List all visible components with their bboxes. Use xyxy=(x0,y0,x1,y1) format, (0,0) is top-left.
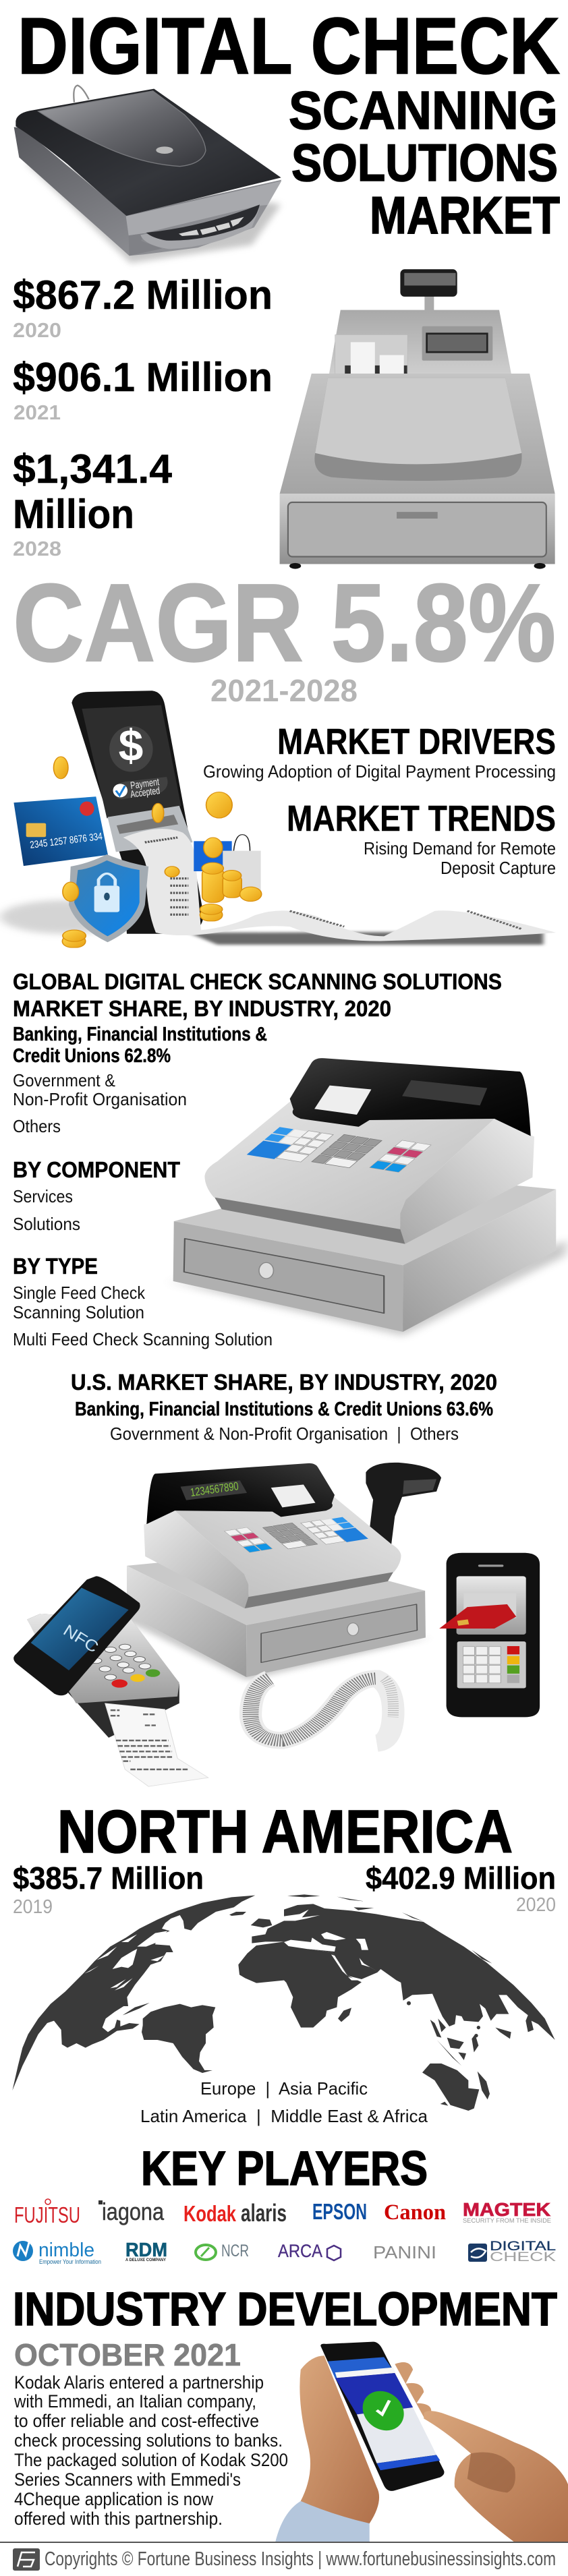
logos row one: alaris xyxy=(241,2199,287,2227)
market size values: 2021 xyxy=(13,401,61,424)
icon: grey cash register xyxy=(280,269,555,569)
by type: BY TYPE xyxy=(13,1254,98,1279)
industry segments: Government & xyxy=(13,1070,115,1090)
regional values: $402.9 Million xyxy=(366,1861,556,1896)
footer rule xyxy=(0,2542,568,2543)
illustration: hands holding phone xyxy=(275,2342,568,2542)
title: SCANNING xyxy=(289,80,558,140)
market size values: Million xyxy=(13,492,134,537)
development text: with Emmedi, an Italian company, xyxy=(13,2391,256,2411)
other regions: Latin America | Middle East & Africa xyxy=(140,2106,428,2126)
world map globe: eastern hemisphere xyxy=(238,1894,555,2111)
regional heading: NORTH AMERICA xyxy=(57,1798,513,1866)
market size values xyxy=(13,272,273,560)
world map globe: western hemisphere xyxy=(12,1896,272,2090)
icon: register with scanner xyxy=(117,1463,431,1680)
CAGR period: 2021-2028 xyxy=(210,673,358,708)
U.S. market share: Government & Non-Profit Organisation | Others xyxy=(110,1424,459,1444)
logos row two: A DELUXE COMPANY xyxy=(125,2258,166,2262)
logos row one: EPSON xyxy=(312,2199,367,2224)
regional values xyxy=(13,1861,556,1918)
by component: Solutions xyxy=(13,1214,80,1234)
icon: large cash register xyxy=(167,1058,568,1336)
development text xyxy=(13,2372,288,2529)
other regions: Europe | Asia Pacific xyxy=(200,2078,368,2099)
logos row two: nimble xyxy=(38,2240,94,2261)
date: OCTOBER 2021 xyxy=(14,2337,241,2372)
development text: Series Scanners with Emmedi's xyxy=(14,2469,241,2490)
development text: offered with this partnership. xyxy=(14,2509,223,2529)
industry segments: Credit Unions 62.8% xyxy=(13,1045,171,1067)
logos row two: RDM xyxy=(125,2240,167,2261)
industry segments: Non-Profit Organisation xyxy=(13,1089,187,1109)
title xyxy=(18,1,560,245)
logos row one: iagona xyxy=(102,2198,165,2225)
key players heading: KEY PLAYERS xyxy=(141,2142,428,2196)
logos row one: Kodak xyxy=(183,2201,236,2226)
by type xyxy=(13,1254,273,1349)
market size values: $867.2 Million xyxy=(13,272,273,318)
market trends: Deposit Capture xyxy=(441,858,556,878)
by type: Multi Feed Check Scanning Solution xyxy=(13,1329,273,1349)
regional values: $385.7 Million xyxy=(13,1861,204,1896)
logos row one: MAGTEK xyxy=(463,2199,550,2220)
register digits: 1234567890 xyxy=(190,1480,239,1499)
regional values: 2020 xyxy=(516,1894,556,1916)
illustration: payment terminal, phone, receipts xyxy=(13,1553,540,1786)
market size values: 2020 xyxy=(13,318,61,342)
market size values: $1,341.4 xyxy=(13,446,173,492)
logos row one xyxy=(14,2198,551,2227)
development text: The packaged solution of Kodak S200 xyxy=(14,2450,288,2470)
global market share heading xyxy=(13,969,502,1021)
industry segments: Banking, Financial Institutions & xyxy=(13,1024,267,1045)
payment accepted label: Accepted xyxy=(130,785,161,800)
icon: flatbed scanner xyxy=(14,86,281,263)
market drivers xyxy=(203,722,556,782)
logos row two: CHECK xyxy=(490,2250,556,2264)
logos row two: Empower Your Information xyxy=(39,2258,101,2265)
logos row one: SECURITY FROM THE INSIDE xyxy=(463,2217,551,2224)
footer logo xyxy=(13,2548,40,2571)
by component: Services xyxy=(13,1186,73,1206)
card number: 2345 1257 8676 334 xyxy=(29,831,103,851)
global market share heading: MARKET SHARE, BY INDUSTRY, 2020 xyxy=(13,996,391,1021)
illustration: payment phone, card, shield, receipt xyxy=(0,691,556,947)
U.S. market share: U.S. MARKET SHARE, BY INDUSTRY, 2020 xyxy=(71,1370,497,1395)
logos row two: NCR xyxy=(221,2242,249,2260)
logos row two: DIGITAL xyxy=(490,2240,556,2254)
U.S. market share xyxy=(71,1370,497,1444)
development text: Kodak Alaris entered a partnership xyxy=(14,2372,264,2393)
by type: Scanning Solution xyxy=(13,1302,144,1322)
regional values: 2019 xyxy=(13,1896,53,1918)
other regions xyxy=(140,2078,428,2126)
industry segments: Others xyxy=(13,1116,61,1136)
logos row two: ARCA xyxy=(278,2241,322,2261)
by type: Single Feed Check xyxy=(13,1283,146,1303)
development text: check processing solutions to banks. xyxy=(14,2430,283,2451)
by component: BY COMPONENT xyxy=(13,1157,180,1182)
phone dollar icon: $ xyxy=(119,720,143,770)
payment accepted label xyxy=(130,776,161,800)
development text: to offer reliable and cost-effective xyxy=(14,2411,259,2431)
NFC label: NFC xyxy=(60,1621,102,1657)
logos row two xyxy=(13,2240,556,2265)
market trends xyxy=(287,798,556,878)
market size values: 2028 xyxy=(13,537,61,560)
by component xyxy=(13,1157,180,1234)
market size values: $906.1 Million xyxy=(13,355,273,400)
logos row two: PANINI xyxy=(373,2242,436,2262)
global market share heading: GLOBAL DIGITAL CHECK SCANNING SOLUTIONS xyxy=(13,969,502,994)
icon: barcode scanner xyxy=(366,1463,441,1545)
U.S. market share: Banking, Financial Institutions & Credit Unions 63.6% xyxy=(75,1399,493,1420)
payment accepted label: Payment xyxy=(130,776,161,792)
development text: 4Cheque application is now xyxy=(14,2489,213,2509)
logos row one: FUJITSU xyxy=(14,2202,80,2227)
industry segments xyxy=(13,1024,267,1136)
logos row one: Canon xyxy=(384,2200,446,2225)
